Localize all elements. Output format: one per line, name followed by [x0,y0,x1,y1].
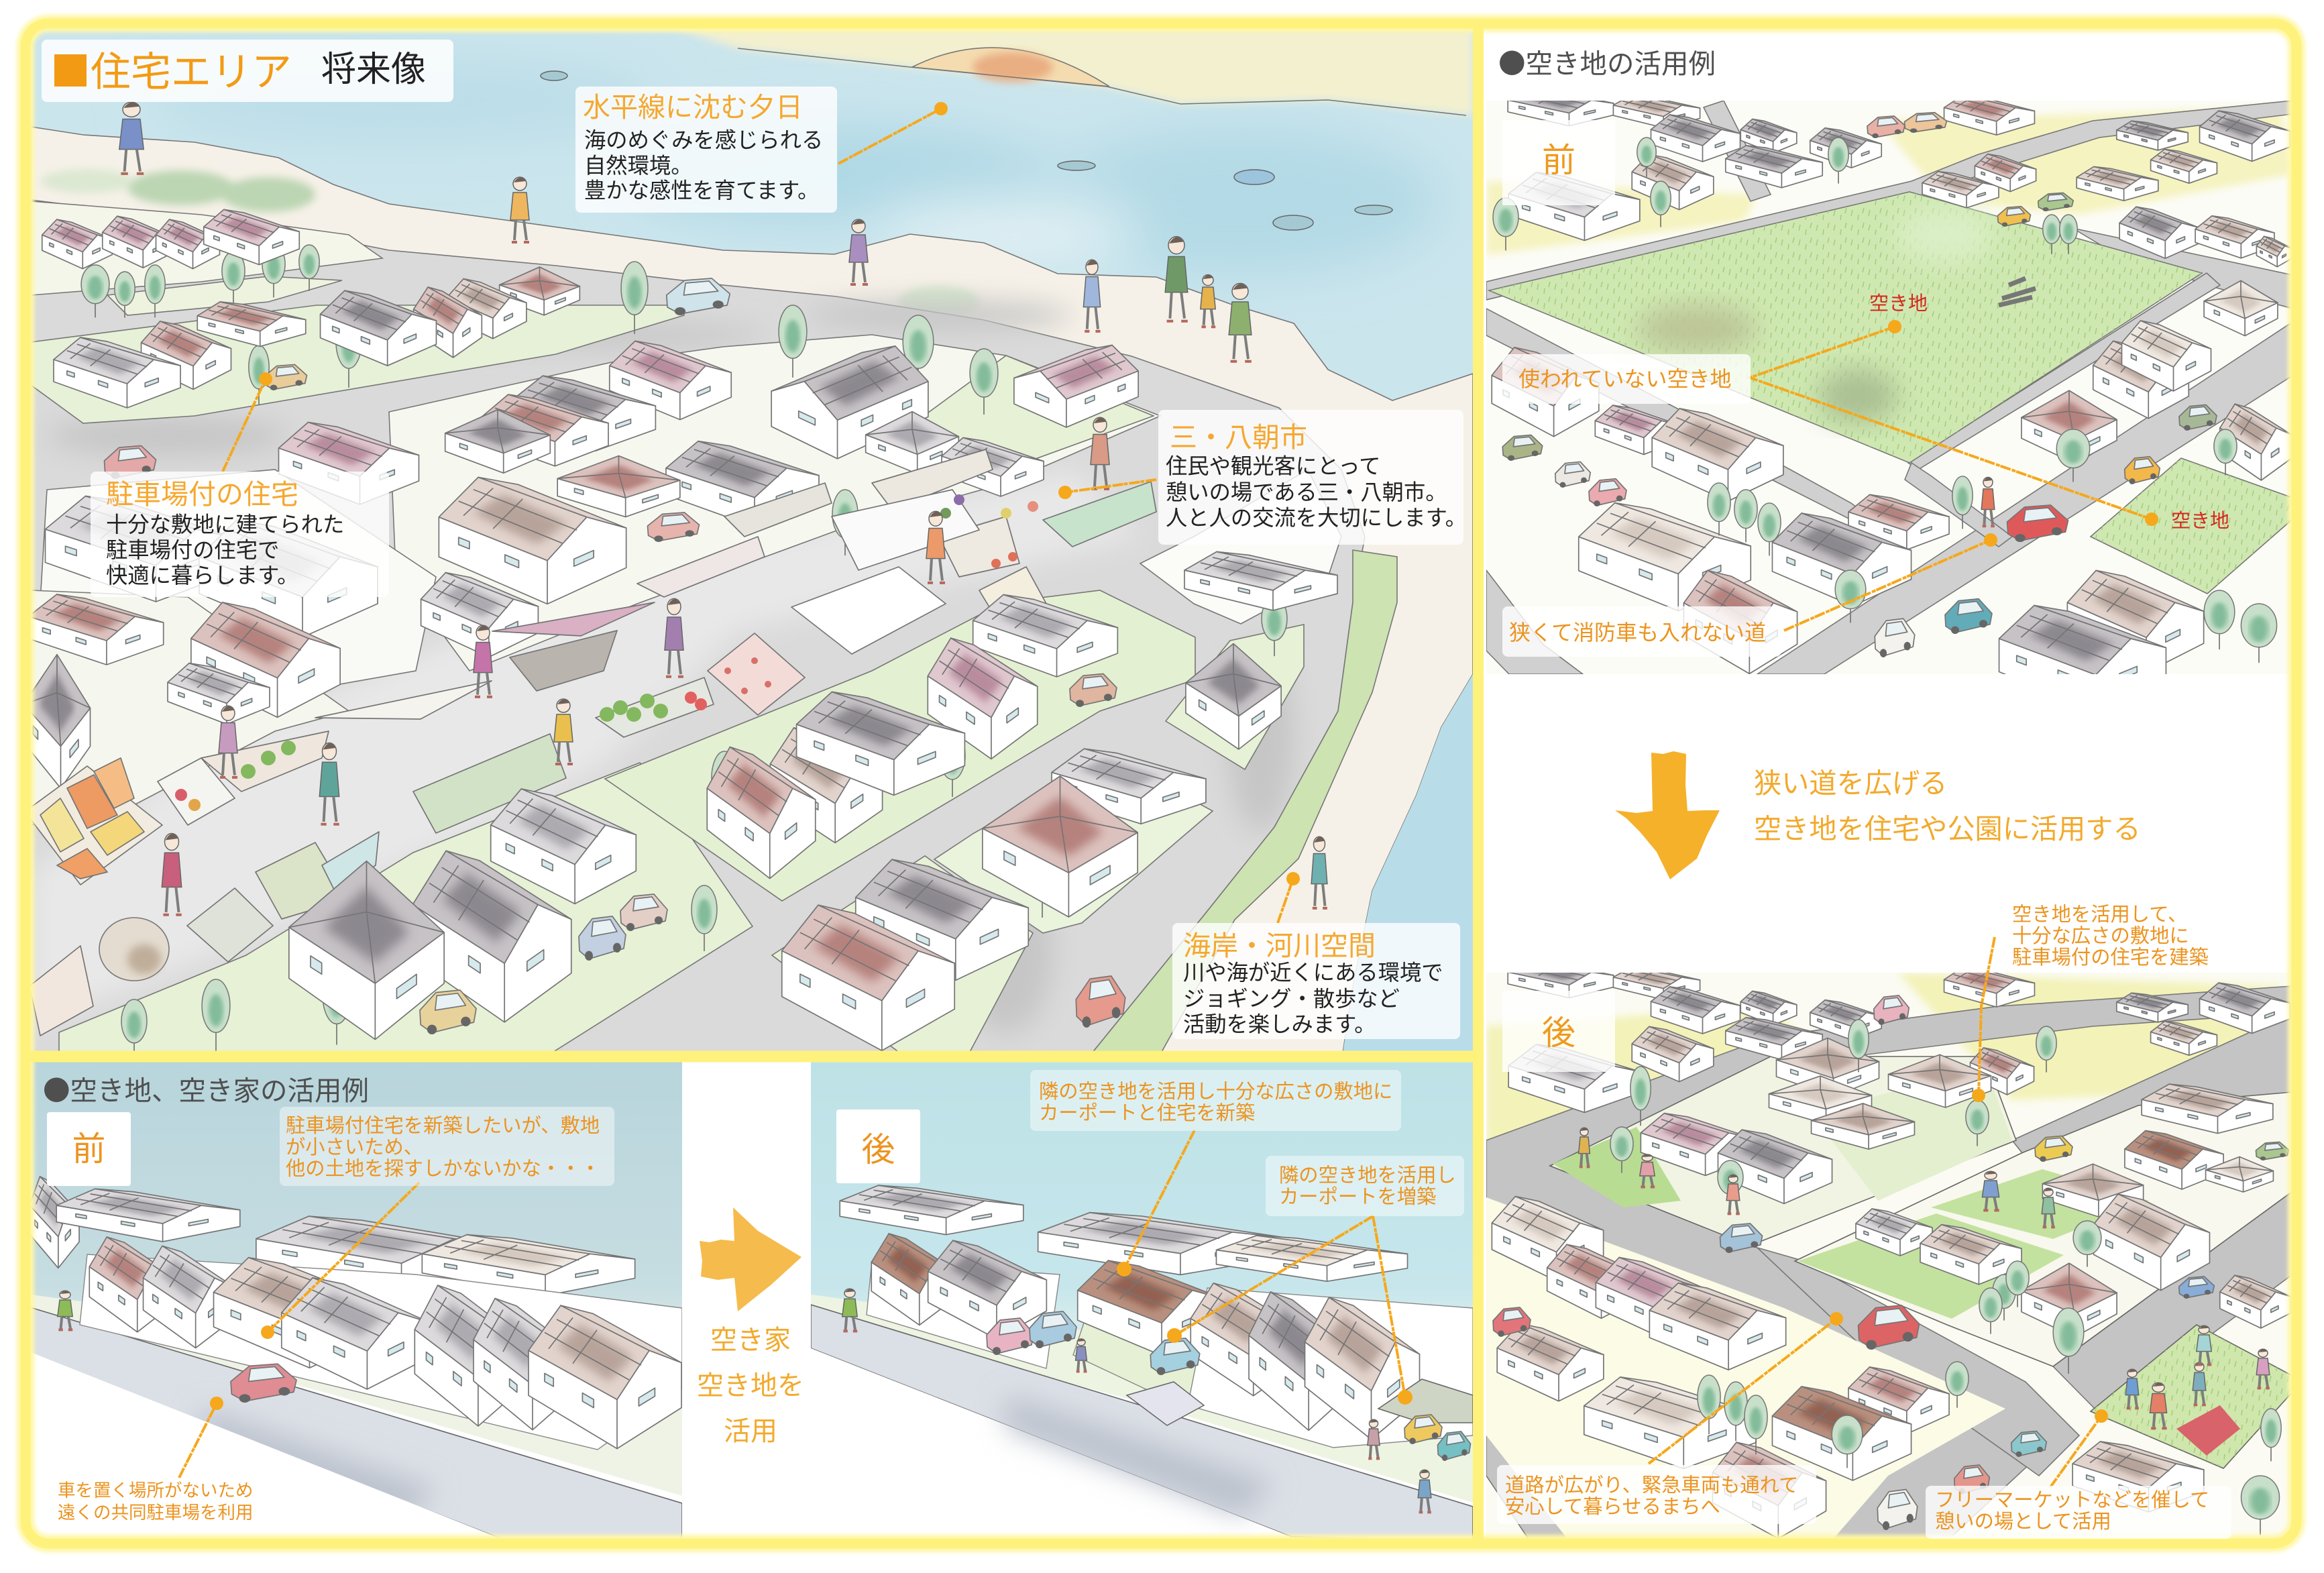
callout: unused lot [1502,354,1751,404]
callout lines: before [1750,320,2158,631]
callout body: 憩いの場である三・八朝市。 [1166,480,1447,504]
street [23,1305,682,1543]
callout body [1166,454,1467,530]
ground [1486,973,2292,1543]
trees [81,245,1287,1059]
trees before [1493,138,2277,663]
callout text [1039,1081,1392,1124]
road network [31,200,1365,1053]
callout text: 使われていない空き地 [1518,367,1731,391]
vehicles before [1502,113,2217,657]
caption: build on vacant lot: 十分な広さの敷地に [2012,925,2189,947]
callout body [106,512,344,588]
callout body: 住民や観光客にとって [1166,454,1380,478]
roads after [1486,986,2292,1543]
badge: before, houses: 前 [72,1130,106,1168]
panel: vacant lot and house example, before [23,1060,682,1543]
badge: before, lots [1502,120,1615,205]
callout body: 活動を楽しみます。 [1183,1012,1376,1036]
panel: vacant lot example, after [1486,937,2292,1543]
arrow text: proposals [1754,761,2141,852]
caption: build on vacant lot: 空き地を活用して、 [2012,904,2187,926]
sea [32,30,1473,400]
back houses after [840,1185,1407,1281]
street houses after [871,1234,1473,1440]
callout body: 快適に暮らします。 [106,563,298,588]
callout body [1183,960,1443,1037]
badge: before, lots: 前 [1542,142,1575,179]
arrow: down to after state [1615,751,1720,879]
callout lines: before [179,1183,419,1478]
callout lines: after [1649,937,2108,1487]
houses: main panel upper rows [24,209,1337,788]
callout: narrow road [1502,606,1781,657]
callout text: フリーマーケットなどを催して [1935,1489,2209,1511]
arrow text: proposals: 空き地を住宅や公園に活用する [1754,814,2141,845]
callout lines: main panel [223,102,1300,923]
arrow caption: 活用 [724,1417,777,1446]
callout: new house on adjacent lot [1030,1070,1401,1131]
vacant field [1489,192,2202,463]
title: future vision: 将来像 [321,50,426,89]
callout lines: after [1117,1130,1413,1405]
callout text [1279,1165,1456,1208]
panel: vacant lot and house example, after [811,1060,1473,1543]
callout heading: 三・八朝市 [1170,422,1307,453]
arrow caption: 空き家 [710,1325,791,1355]
badge: before, houses [47,1112,131,1186]
arrow caption: 空き地を [697,1371,804,1401]
heading: vacant lot example: ●空き地の活用例 [1498,42,1716,81]
lots wash [1486,973,2292,1442]
heading: vacant lot and house examples: ●空き地、空き家の活用例 [43,1069,369,1108]
produce on stalls [175,494,1038,811]
callout body: 川や海が近くにある環境で [1183,961,1443,985]
callout text: 駐車場付住宅を新築したいが、敷地 [286,1115,600,1137]
badge: after, houses: 後 [861,1131,895,1169]
market umbrella [99,918,169,981]
callout: wider roads [1497,1465,1816,1524]
panel: vacant lot example, before [1486,89,2292,711]
arrow caption [686,1317,815,1454]
coastal bushes [40,169,979,318]
market stalls and awnings [25,449,1156,1036]
callout text: 隣の空き地を活用し十分な広さの敷地に [1039,1081,1392,1103]
sky wash [31,1060,682,1382]
callout body: 豊かな感性を育てます。 [584,178,819,203]
callout text: カーポートと住宅を新築 [1039,1102,1255,1124]
caption: no parking: 車を置く場所がないため [58,1480,254,1501]
fish [541,71,1392,230]
callout body: 自然環境。 [584,153,692,177]
houses before [1492,154,2292,711]
street facade underlay before [80,1254,682,1450]
street houses before [89,1237,681,1449]
car and person before [58,1291,296,1403]
caption: build on vacant lot: 駐車場付の住宅を建築 [2012,946,2209,969]
houses: main panel lower rows [289,594,1281,1050]
cars [105,278,1125,1034]
panel: main residential area illustration [24,27,1473,1059]
upper houses after [1508,961,2290,1112]
red label: vacant lot 2: 空き地 [2171,510,2229,532]
callout line above after panel [1981,937,1995,1006]
callout heading: 駐車場付の住宅 [106,479,298,510]
callout text: 他の土地を探すしかないかな・・・ [286,1158,600,1180]
market street wash [31,470,1140,1026]
houses after [1492,1038,2290,1539]
callout text: 道路が広がり、緊急車両も通れて [1505,1474,1798,1497]
badge: after, houses [836,1109,920,1183]
callout text [286,1116,600,1180]
upper houses before [1508,89,2290,240]
beach [31,127,1473,1053]
green river strip [1092,550,1397,1053]
callout text: が小さいため、 [286,1136,423,1158]
trees after [1610,1020,2281,1535]
callout text [1935,1490,2209,1533]
vehicles and residents after [1493,995,2288,1530]
second vacant field [2091,458,2292,594]
callout heading: 水平線に沈む夕日 [583,92,803,123]
callout body: 駐車場付の住宅で [106,538,279,562]
callout body [584,128,823,203]
cars and residents after [842,1289,1470,1512]
people [119,102,1327,915]
block two with gardens [1795,1092,2292,1366]
callout heading: 海岸・河川空間 [1183,930,1376,961]
title [42,40,453,102]
flea market lot [2091,1325,2292,1468]
street facade underlays after [867,1261,1473,1448]
caption: no parking [58,1480,254,1524]
residential lots [31,201,1341,1053]
callout: flea market [1926,1486,2231,1539]
callout text [1505,1475,1798,1518]
red label: vacant lot 1: 空き地 [1869,292,1928,315]
roads before [1486,101,2292,674]
callout text: 隣の空き地を活用し [1279,1164,1456,1187]
callout text: カーポートを増築 [1279,1186,1436,1208]
callout: sunset [575,87,837,213]
arrow text: proposals: 狭い道を広げる [1754,768,1947,799]
callout: want to build [280,1107,614,1186]
arrow: vacant house conversion [700,1207,801,1311]
street [811,1305,1473,1541]
sky wash [811,1060,1473,1382]
badge: after, lots [1502,991,1615,1072]
callout text: 憩いの場として活用 [1935,1511,2111,1533]
ground [1486,101,2292,674]
east sea water [1343,674,1473,1053]
callout body: 海のめぐみを感じられる [584,128,823,152]
lower-left yellow lot [1486,1197,2005,1541]
callout text: 安心して暮らせるまちへ [1505,1496,1720,1518]
title: residential area: ■住宅エリア [50,40,292,98]
callout: carport extension [1266,1156,1464,1216]
caption: no parking: 遠くの共同駐車場を利用 [58,1503,254,1523]
caption: build on vacant lot [2012,904,2209,969]
back houses before [30,1177,635,1296]
sky and setting sun [671,27,1473,115]
callout: houses with parking [91,472,389,597]
callout: morning market [1158,410,1463,545]
badge: after, lots: 後 [1542,1014,1575,1052]
callout: coast and river [1172,923,1460,1039]
callout body: 人と人の交流を大切にします。 [1166,506,1467,530]
callout text: 狭くて消防車も入れない道 [1509,620,1766,645]
block one with garden [1550,1056,2016,1246]
callout body: ジョギング・散歩など [1183,986,1400,1010]
upper lots wash [1486,107,2292,255]
callout body: 十分な敷地に建てられた [106,512,344,537]
